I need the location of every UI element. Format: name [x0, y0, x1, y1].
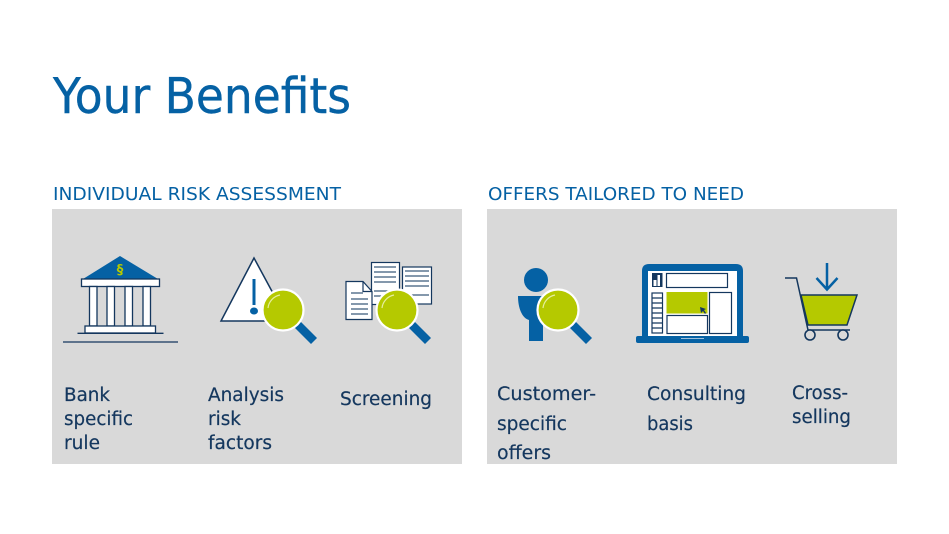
icon: person with magnifier: [518, 268, 589, 341]
label: bank specific rule: Bank: [64, 385, 110, 406]
heading: individual risk assessment: INDIVIDUAL RISK ASSESSMENT: [53, 184, 342, 205]
label: analysis risk factors: Analysis: [208, 385, 284, 406]
label: screening: Screening: [340, 389, 432, 410]
label: consulting basis: basis: [647, 414, 693, 435]
icon: bank building: [63, 256, 178, 342]
icon: bank building: §: [117, 263, 124, 278]
panel: individual risk assessment: [52, 209, 462, 464]
icon: shopping cart with arrow: [785, 263, 857, 340]
icon: warning triangle with magnifier: [221, 258, 314, 341]
label: analysis risk factors: risk: [208, 409, 241, 430]
heading: offers tailored to need: OFFERS TAILORED TO NEED: [488, 184, 744, 205]
panel: offers tailored to need: [487, 209, 897, 464]
icon: documents with magnifier: [346, 262, 432, 341]
label: bank specific rule: specific: [64, 409, 133, 430]
label: analysis risk factors: factors: [208, 433, 272, 454]
label: customer-specific offers: Customer-: [497, 384, 596, 405]
label: cross-selling: selling: [792, 407, 851, 428]
label: bank specific rule: rule: [64, 433, 100, 454]
label: consulting basis: Consulting: [647, 384, 746, 405]
label: customer-specific offers: offers: [497, 443, 551, 464]
title: Your Benefits: [52, 68, 351, 125]
label: cross-selling: Cross-: [792, 383, 848, 404]
icon: laptop with consulting screen: [636, 264, 749, 343]
label: customer-specific offers: specific: [497, 414, 567, 435]
